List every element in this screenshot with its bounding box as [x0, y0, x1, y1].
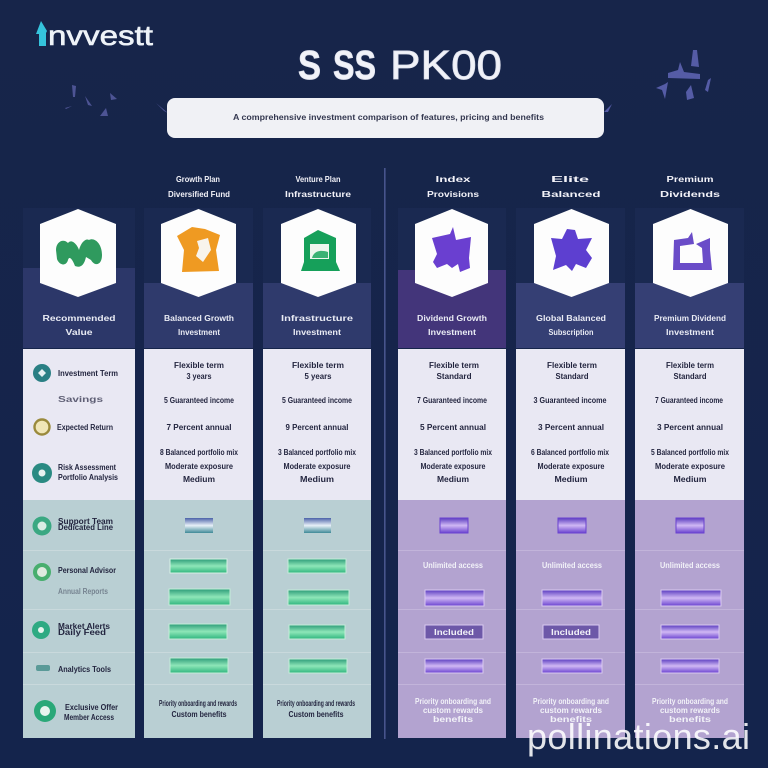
column 2: green plan — [263, 208, 371, 738]
heading plan 4: Elite — [551, 175, 590, 184]
band label: Global Balanced — [536, 314, 606, 323]
label: access: Member Access — [64, 713, 114, 722]
heading plan 3: Provisions — [427, 190, 480, 199]
feature badges — [169, 518, 230, 673]
heading plan 1: Growth Plan — [176, 175, 220, 184]
icon: term — [33, 364, 51, 382]
cell values: Standard — [556, 372, 589, 381]
band label — [164, 314, 234, 337]
icon: returns — [34, 420, 50, 434]
feature badges — [660, 518, 721, 673]
column 0: features — [23, 208, 135, 738]
heading plan 2 — [285, 175, 352, 199]
band label — [42, 314, 116, 337]
band label — [536, 314, 606, 337]
decoration: left sparkles — [65, 85, 168, 116]
hexagon icon: green building — [281, 209, 356, 297]
hexagon icon: purple star — [534, 209, 609, 297]
band label: Recommended — [42, 314, 116, 323]
cell values: 7 Guaranteed income — [417, 396, 487, 405]
cell values: Moderate exposure — [284, 462, 351, 471]
cell values: 3 Balanced portfolio mix — [278, 448, 356, 457]
band label — [417, 314, 487, 337]
footer text: Priority onboarding and — [533, 697, 609, 706]
footer text: benefits — [550, 715, 593, 724]
band label: Dividend Growth — [417, 314, 487, 323]
feature badges — [423, 518, 484, 673]
hexagon icon: orange — [161, 209, 236, 297]
footer text: Priority onboarding and — [652, 697, 728, 706]
label: alerts — [58, 622, 111, 637]
label: savings: Savings — [58, 395, 104, 404]
subtitle banner: A comprehensive investment comparison of features, pricing and benefits — [233, 112, 544, 122]
hexagon icon: purple outline — [653, 209, 728, 297]
column 1: green plan — [144, 208, 253, 738]
icon: risk — [32, 463, 52, 483]
footer text: custom rewards — [423, 706, 484, 715]
cell values: Medium — [554, 475, 588, 484]
heading plan 2: Venture Plan — [296, 175, 341, 184]
band label: Premium Dividend — [654, 314, 726, 323]
band label: Value — [66, 328, 93, 337]
label: alerts: Market Alerts — [58, 622, 111, 631]
heading plan 3: Index — [436, 175, 471, 184]
footer text — [652, 697, 728, 724]
label: access: Exclusive Offer — [65, 703, 118, 712]
cell values: Medium — [183, 475, 215, 484]
label: support: Support Team — [58, 517, 113, 526]
title: S — [298, 42, 321, 88]
footer text: benefits — [669, 715, 712, 724]
band label: Infrastructure — [281, 314, 354, 323]
label: term: Investment Term — [58, 369, 118, 378]
heading plan 1 — [168, 175, 230, 199]
heading plan 5: Dividends — [660, 190, 721, 199]
band label — [281, 314, 354, 337]
icon: advisor — [33, 563, 51, 581]
hexagon icon: purple — [415, 209, 488, 297]
cell values: Moderate exposure — [538, 462, 605, 471]
cell values: Standard — [436, 372, 472, 381]
cell values: Flexible term — [666, 361, 714, 370]
title — [298, 42, 502, 88]
logo wordmark: nvvestt — [48, 20, 153, 51]
cell values: Medium — [437, 475, 469, 484]
cell values: Moderate exposure — [165, 462, 234, 471]
cell values — [278, 361, 356, 484]
icon: access — [34, 700, 56, 722]
footer text: Priority onboarding and — [415, 697, 491, 706]
cell values: 3 Percent annual — [538, 423, 604, 432]
cell values: Moderate exposure — [655, 462, 726, 471]
feature badges: Unlimited access — [660, 561, 720, 570]
band label: Investment — [666, 328, 714, 337]
cell values: 3 Guaranteed income — [534, 396, 607, 405]
cell values: Medium — [300, 475, 334, 484]
cell values: Flexible term — [174, 361, 224, 370]
feature badges — [542, 518, 602, 673]
feature badges — [288, 518, 349, 673]
heading plan 1: Diversified Fund — [168, 190, 230, 199]
heading plan 5: Premium — [666, 175, 714, 184]
cell values: Flexible term — [292, 361, 344, 370]
decoration: right sparkles — [604, 50, 711, 112]
cell values: 7 Percent annual — [166, 423, 232, 432]
footer text: benefits — [433, 715, 474, 724]
title: SS — [333, 42, 376, 88]
footer text: custom rewards — [540, 706, 603, 715]
label: advisor: Personal Advisor — [58, 566, 116, 575]
footer text — [533, 697, 609, 724]
column 4: purple plan — [516, 208, 625, 738]
cell values: 5 years — [304, 372, 332, 381]
footer text: custom rewards — [660, 706, 721, 715]
icon: logo mark — [36, 21, 47, 46]
feature badges: Included — [551, 628, 591, 637]
subtitle banner — [167, 98, 604, 138]
footer text — [159, 699, 237, 719]
footer text: Priority onboarding and rewards — [277, 699, 355, 708]
footer text: Priority onboarding and rewards — [159, 699, 237, 708]
cell values: 8 Balanced portfolio mix — [160, 448, 238, 457]
cell values — [531, 361, 609, 484]
icon: support — [32, 516, 52, 536]
label: alerts: Daily Feed — [58, 628, 106, 637]
label: returns: Expected Return — [57, 423, 113, 432]
label: support — [58, 517, 114, 532]
label: risk — [58, 463, 118, 482]
cell values: 6 Balanced portfolio mix — [531, 448, 609, 457]
center divider — [384, 168, 386, 739]
cell values: 3 Percent annual — [657, 423, 723, 432]
cell values: Flexible term — [547, 361, 597, 370]
feature row labels — [32, 364, 118, 722]
heading plan 5 — [660, 175, 721, 199]
icon: alerts — [32, 621, 50, 639]
heading plan 2: Infrastructure — [285, 190, 352, 199]
heading plan 3 — [427, 175, 480, 199]
hexagon icon: green — [40, 209, 116, 297]
column 5: purple plan — [635, 208, 744, 738]
label: risk: Risk Assessment — [58, 463, 116, 472]
cell values: Standard — [674, 372, 707, 381]
watermark: pollinations.ai — [527, 716, 750, 757]
cell values — [414, 361, 492, 484]
feature badges: Unlimited access — [423, 561, 483, 570]
cell values — [160, 361, 238, 484]
cell values: 5 Guaranteed income — [282, 396, 352, 405]
feature badges: Included — [434, 628, 474, 637]
heading plan 4: Balanced — [542, 190, 601, 199]
cell values: Moderate exposure — [420, 462, 486, 471]
title: PK00 — [390, 42, 502, 88]
logo — [36, 20, 153, 51]
footer text: Custom benefits — [172, 710, 227, 719]
footer text: Custom benefits — [288, 710, 344, 719]
column 3: purple plan — [398, 208, 506, 738]
cell values — [651, 361, 729, 484]
footer text — [415, 697, 491, 724]
band label — [654, 314, 726, 337]
icon: tools — [36, 665, 50, 671]
cell values: 3 Balanced portfolio mix — [414, 448, 492, 457]
cell values: 3 years — [186, 372, 212, 381]
heading plan 4 — [542, 175, 601, 199]
label: support: Dedicated Line — [58, 523, 114, 532]
band label: Balanced Growth — [164, 314, 234, 323]
plan headings — [168, 175, 721, 199]
label: risk: Portfolio Analysis — [58, 473, 118, 482]
band label: Investment — [428, 328, 476, 337]
label: tools: Analytics Tools — [58, 665, 111, 674]
band label: Investment — [293, 328, 341, 337]
cell values: 5 Balanced portfolio mix — [651, 448, 729, 457]
cell values: 7 Guaranteed income — [655, 396, 723, 405]
band label: Subscription — [548, 328, 594, 337]
cell values: 9 Percent annual — [286, 423, 348, 432]
footer text — [277, 699, 355, 719]
label: access — [64, 703, 118, 722]
cell values: Medium — [674, 475, 706, 484]
feature badges: Unlimited access — [542, 561, 602, 570]
band label: Investment — [178, 328, 220, 337]
label: reports: Annual Reports — [58, 587, 108, 596]
cell values: 5 Guaranteed income — [164, 396, 234, 405]
cell values: Flexible term — [429, 361, 479, 370]
cell values: 5 Percent annual — [420, 423, 486, 432]
